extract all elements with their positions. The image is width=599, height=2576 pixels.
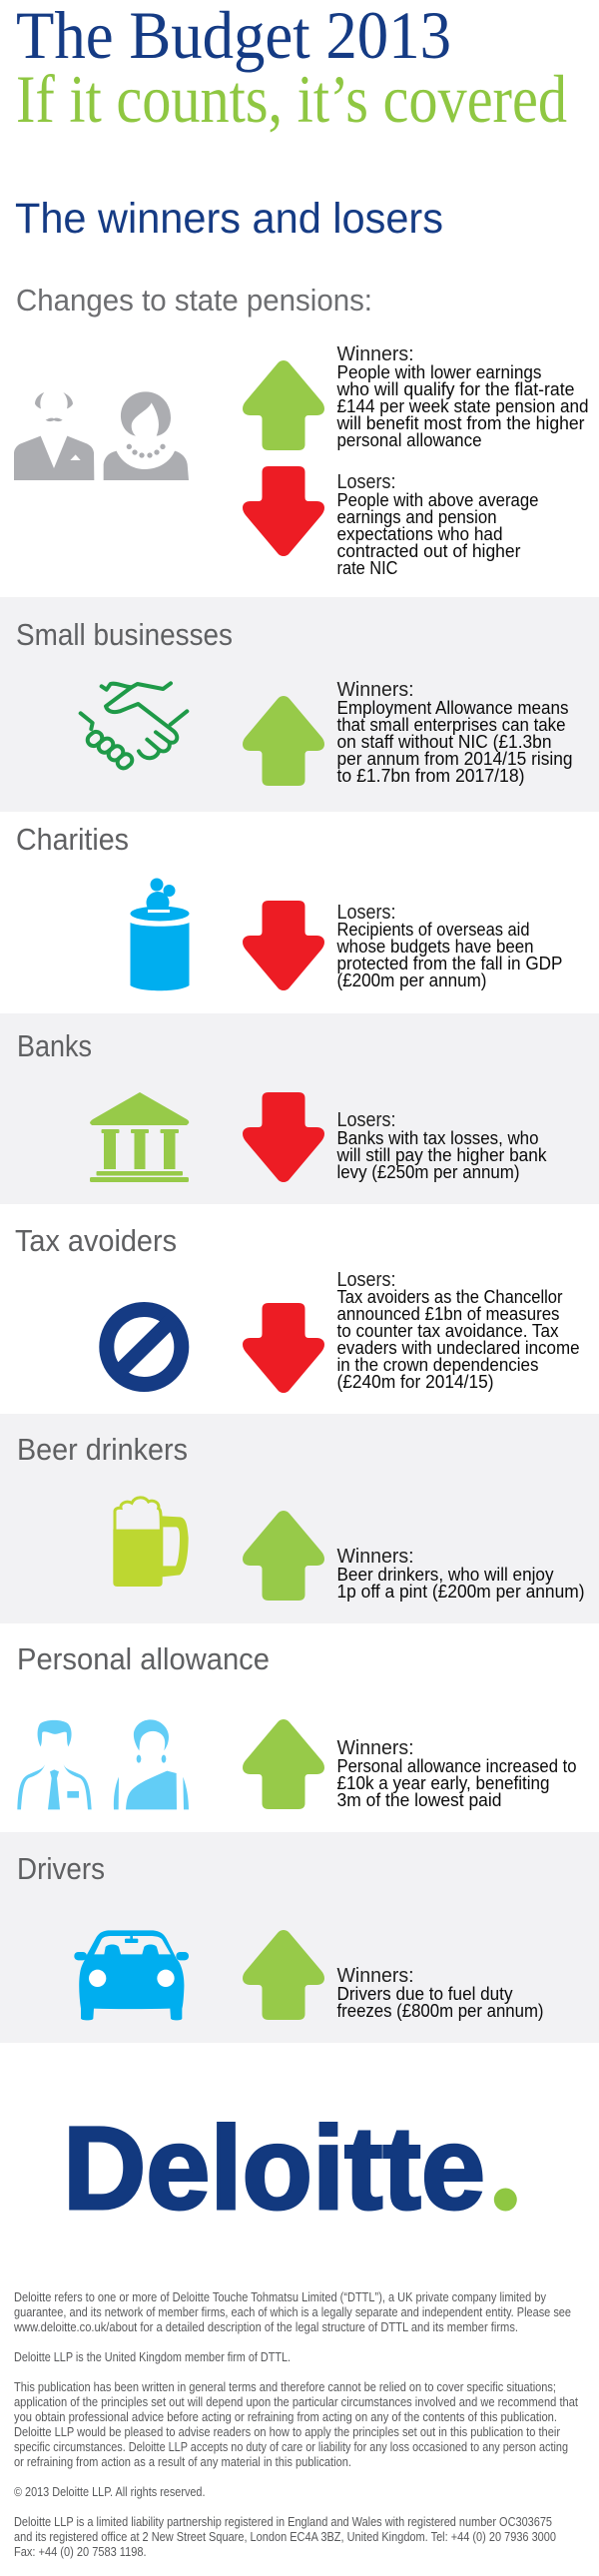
text: winners: will benefit most from the higher — [336, 413, 585, 433]
text: losers: levy (£250m per annum) — [337, 1162, 519, 1182]
arrow: up — [243, 1511, 324, 1601]
arrow: up — [243, 1719, 324, 1809]
text: losers: Banks with tax losses, who — [337, 1128, 539, 1148]
panel: personal allowance — [0, 1623, 599, 1832]
text: losers: Losers: — [337, 471, 395, 493]
text: losers — [336, 902, 563, 990]
heading: personal allowance: Personal allowance — [17, 1641, 270, 1676]
text: winners — [337, 1965, 543, 2021]
text: losers: whose budgets have been — [336, 937, 533, 957]
text: winners: 1p off a pint (£200m per annum) — [337, 1582, 585, 1602]
heading: drivers: Drivers — [17, 1851, 105, 1886]
text: winners: to £1.7bn from 2017/18) — [337, 766, 525, 786]
text: losers: in the crown dependencies — [337, 1355, 539, 1375]
text: losers: Tax avoiders as the Chancellor — [337, 1287, 563, 1307]
logo: Deloitte: Deloitte — [63, 2103, 485, 2235]
heading: banks: Banks — [17, 1028, 92, 1063]
text: winners: Winners: — [337, 1546, 413, 1568]
arrow: down — [243, 901, 324, 990]
arrow: down — [243, 1303, 324, 1393]
icon: elderly couple — [14, 391, 189, 480]
arrow: down — [243, 466, 324, 556]
text: losers: (£200m per annum) — [337, 970, 487, 990]
text: winners: Drivers due to fuel duty — [337, 1984, 513, 2004]
text: losers: People with above average — [337, 490, 539, 510]
panel: tax avoiders — [0, 1204, 599, 1414]
text: legal disclaimer: or refraining from action as a result of any material in this publication. — [14, 2454, 351, 2469]
text: legal disclaimer: www.deloitte.co.uk/about for a detailed description of the legal structure of DTTL and its member firms. — [13, 2319, 518, 2334]
text: winners: Employment Allowance means — [337, 698, 569, 718]
heading: the winners and losers: The winners and losers — [15, 195, 443, 243]
text: winners: Winners: — [337, 1737, 413, 1759]
text: winners — [337, 1546, 585, 1602]
text: winners: Beer drinkers, who will enjoy — [337, 1565, 553, 1585]
text: winners: Personal allowance increased to — [337, 1756, 577, 1776]
icon: working man and woman — [17, 1719, 189, 1809]
panel: banks — [0, 1013, 599, 1204]
text: winners — [337, 679, 573, 786]
icon: prohibition sign — [107, 1310, 182, 1384]
text: losers: evaders with undeclared income — [337, 1338, 579, 1358]
text: losers — [337, 471, 539, 578]
text: losers — [337, 1269, 579, 1392]
panel: charities — [0, 812, 599, 1013]
text: losers — [336, 1109, 547, 1182]
text: winners: personal allowance — [337, 430, 481, 450]
heading: beer drinkers: Beer drinkers — [17, 1432, 188, 1467]
arrow: down — [243, 1092, 324, 1182]
text: losers: expectations who had — [337, 524, 503, 544]
text: winners: per annum from 2014/15 rising — [337, 749, 573, 769]
panel: small businesses — [0, 597, 599, 812]
icon: beer mug — [113, 1498, 189, 1587]
text: losers: Losers: — [337, 902, 395, 924]
icon: car — [74, 1930, 189, 2020]
icon: handshake — [81, 683, 187, 771]
panel: beer drinkers — [0, 1414, 599, 1623]
heading: tax avoiders: Tax avoiders — [15, 1223, 177, 1258]
icon: bank building — [90, 1092, 189, 1182]
text: winners: that small enterprises can take — [337, 715, 565, 735]
text: winners: £10k a year early, benefiting — [337, 1773, 549, 1793]
text: winners: Winners: — [337, 343, 413, 365]
text: legal disclaimer: Fax: +44 (0) 20 7583 1198. — [14, 2544, 147, 2559]
text: losers: to counter tax avoidance. Tax — [337, 1321, 559, 1341]
panel: drivers — [0, 1832, 599, 2043]
text: losers: Losers: — [337, 1109, 395, 1131]
icon: charity collection tin — [130, 879, 190, 990]
arrow: up — [243, 1930, 324, 2020]
heading: small businesses: Small businesses — [16, 617, 233, 652]
text: winners: Winners: — [337, 679, 413, 701]
text: winners: 3m of the lowest paid — [337, 1790, 501, 1810]
text: losers: Recipients of overseas aid — [337, 920, 529, 940]
heading: changes to state pensions: Changes to state pensions: — [16, 283, 372, 318]
text: winners — [336, 343, 589, 450]
text: winners: freezes (£800m per annum) — [337, 2001, 543, 2021]
text: winners: Winners: — [337, 1965, 413, 1987]
text: losers: protected from the fall in GDP — [337, 954, 563, 973]
text: winners: on staff without NIC (£1.3bn — [337, 732, 551, 752]
text: losers: earnings and pension — [337, 507, 497, 527]
text: legal disclaimer — [13, 2289, 578, 2559]
panel: changes to state pensions — [0, 280, 599, 597]
text: legal disclaimer: © 2013 Deloitte LLP. All rights reserved. — [14, 2484, 206, 2499]
arrow: up — [243, 696, 324, 786]
text: losers: (£240m for 2014/15) — [337, 1372, 493, 1392]
arrow: up — [243, 360, 324, 450]
text: losers: will still pay the higher bank — [336, 1145, 547, 1165]
text: losers: contracted out of higher — [337, 541, 521, 561]
text: legal disclaimer: Deloitte LLP is the United Kingdom member firm of DTTL. — [14, 2349, 291, 2364]
text: winners: People with lower earnings — [337, 362, 541, 382]
text: winners: £144 per week state pension and — [337, 396, 589, 416]
text: losers: rate NIC — [337, 558, 397, 578]
text: losers: announced £1bn of measures — [337, 1304, 559, 1324]
text: winners: who will qualify for the flat-rate — [336, 379, 575, 399]
text: winners — [337, 1737, 577, 1810]
heading: charities: Charities — [16, 822, 129, 857]
text: losers: Losers: — [337, 1269, 395, 1291]
